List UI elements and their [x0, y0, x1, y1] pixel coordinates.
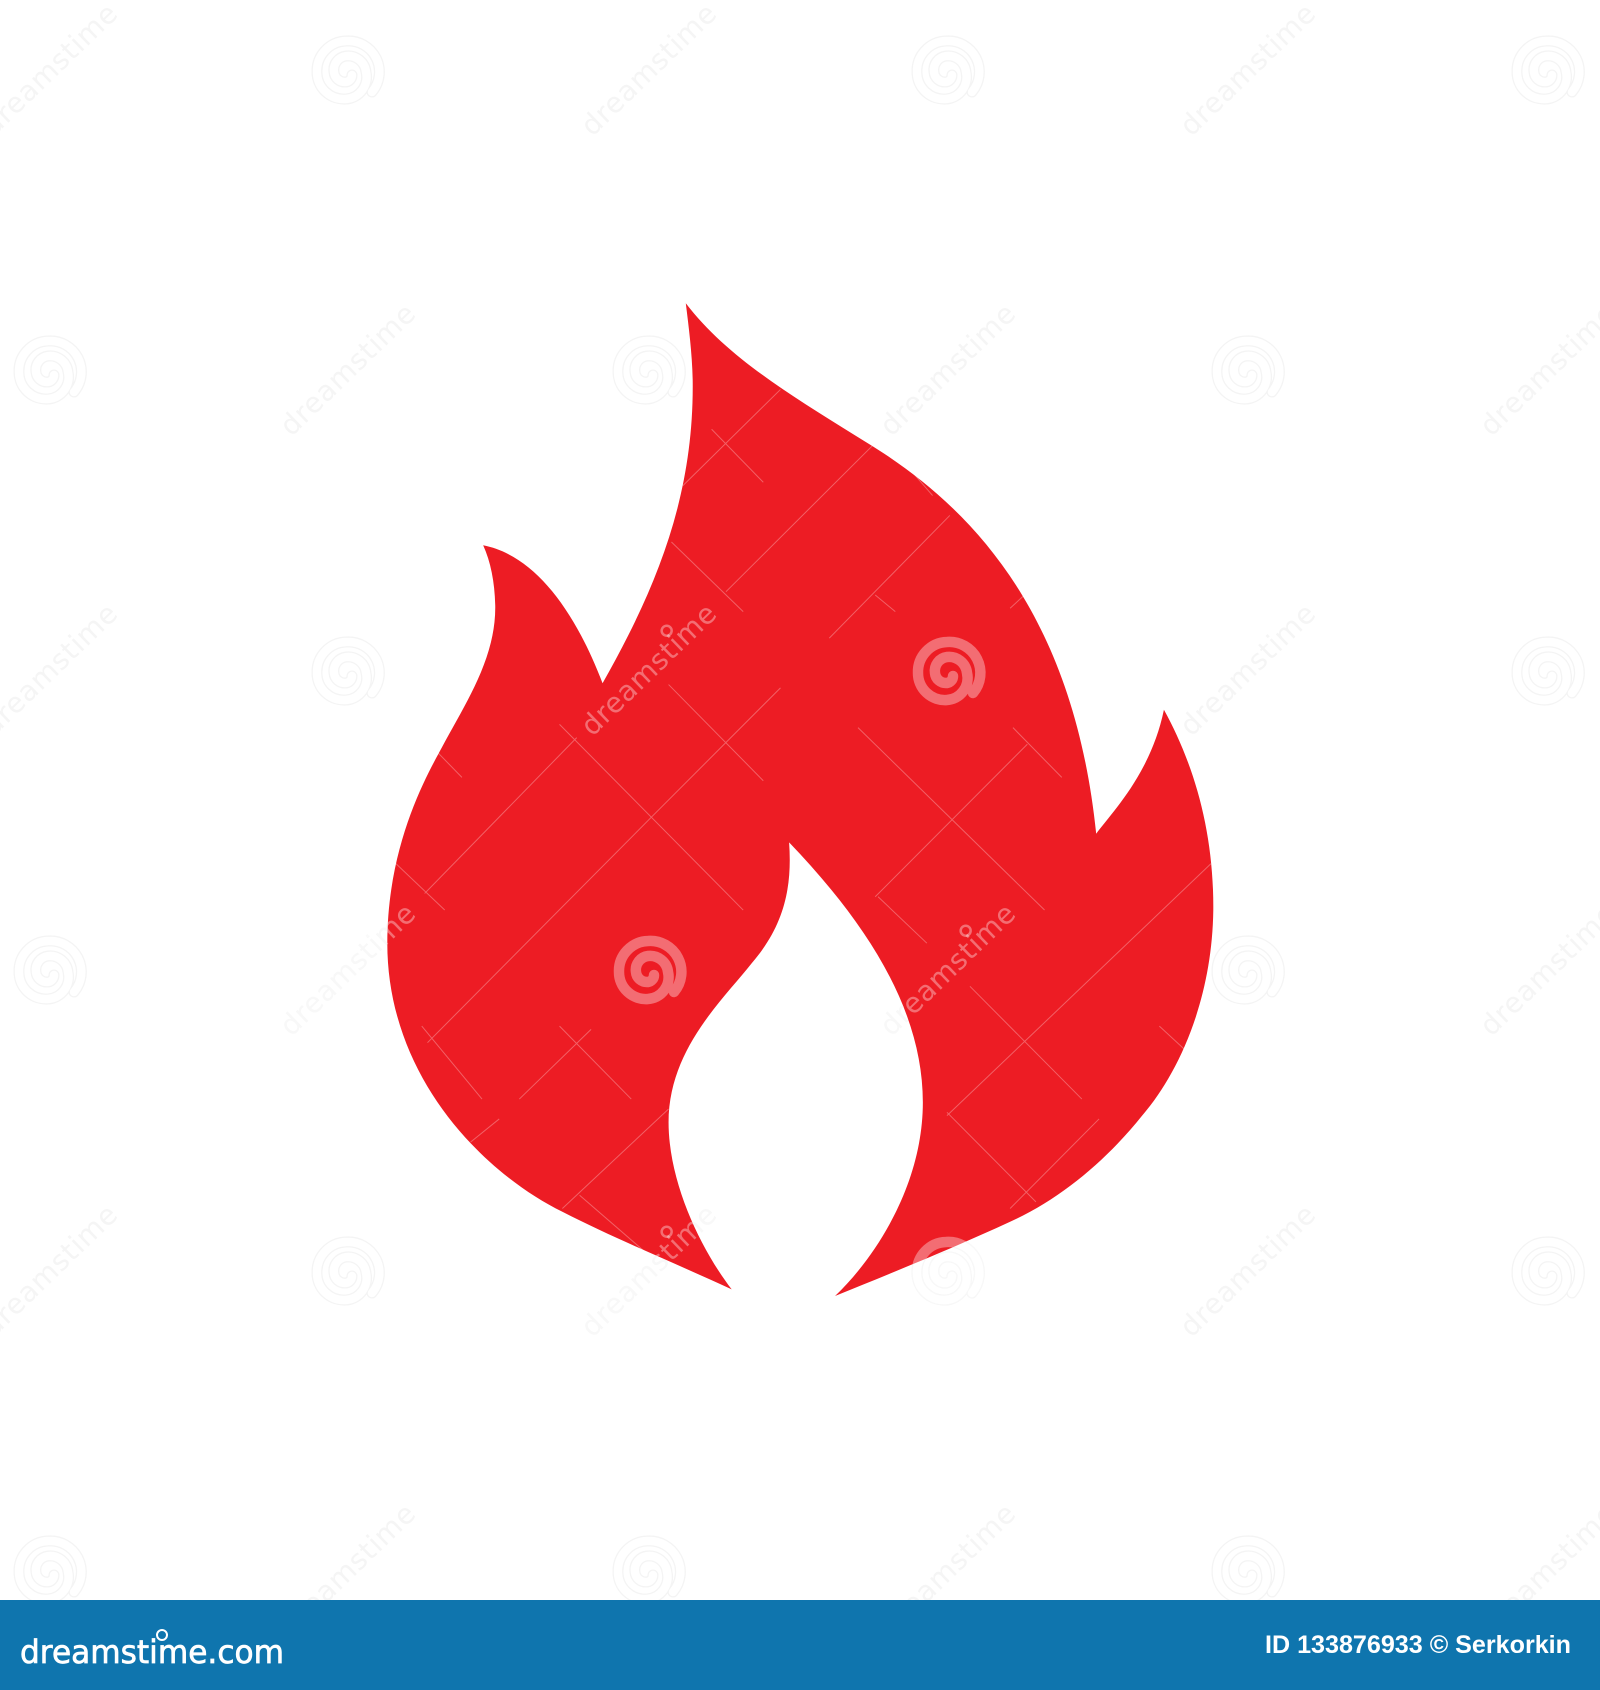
- watermark: faint diagonal text on white: dreamstime: [873, 897, 1022, 1042]
- watermark: faint diagonal text on white: dreamstime: [273, 297, 422, 442]
- watermark: faint diagonal text on white: dreamstime: [1173, 597, 1322, 742]
- watermark: diagonal text over flame: dreamstime: [873, 897, 1022, 1042]
- watermark: faint diagonal text on white: dreamstime: [574, 0, 723, 142]
- footer bar: [0, 1600, 1600, 1690]
- watermark: thin diagonal lines over flame: [396, 389, 1211, 1255]
- watermark: faint diagonal text on white: dreamstime: [273, 1497, 422, 1642]
- footer logo: dreamstime.com: dreamstime.com: [20, 1633, 284, 1671]
- watermark: diagonal text over flame: dreamstime: [574, 1198, 723, 1343]
- footer credit: image id and author: ID 133876933 © Serkorkin: [1265, 1631, 1571, 1659]
- watermark: faint diagonal text on white: dreamstime: [1173, 0, 1322, 142]
- watermark: diagonal text over flame: [270, 594, 1022, 1343]
- watermark: diagonal text over flame: dreamstime: [574, 597, 723, 742]
- watermark: faint diagonal text on white: dreamstime: [873, 297, 1022, 442]
- watermark: spirals over flame: [619, 642, 980, 1300]
- icon: red flame: [387, 303, 1213, 1296]
- watermark: faint diagonal text on white: dreamstime: [574, 1198, 723, 1343]
- watermark: faint diagonal text on white: dreamstime: [273, 897, 422, 1042]
- watermark: faint diagonal text on white: dreamstime: [1173, 1198, 1322, 1343]
- watermark: faint diagonal text on white: dreamstime: [873, 1497, 1022, 1642]
- watermark: diagonal text over flame: dreamstime: [273, 897, 422, 1042]
